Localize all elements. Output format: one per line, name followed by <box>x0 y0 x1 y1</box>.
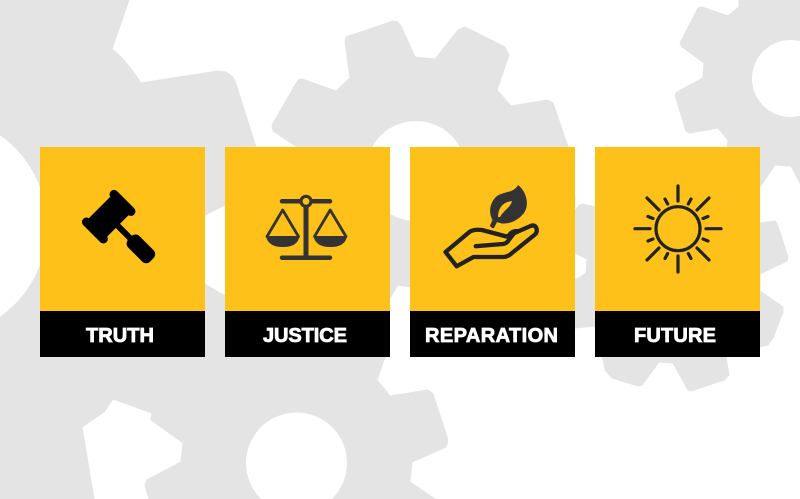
hole: top right gear <box>752 40 800 117</box>
card background <box>40 147 205 311</box>
icon: sun <box>635 186 721 272</box>
gear: top centre <box>250 21 575 300</box>
label bar <box>410 311 575 357</box>
heading: justice: JUSTICE <box>263 325 347 347</box>
heading: future: FUTURE <box>634 325 716 347</box>
gear: large left <box>0 0 300 499</box>
label bar <box>595 311 760 357</box>
hole: bottom centre gear <box>246 412 347 499</box>
icon: hand with leaf <box>446 185 537 266</box>
gear: top right <box>675 0 800 187</box>
hole: top centre gear <box>366 121 466 221</box>
icon: gavel <box>80 188 169 277</box>
heading: reparation: REPARATION <box>425 325 558 347</box>
panel: justice <box>225 147 390 357</box>
hole: left gear <box>0 115 47 337</box>
gear: lower right <box>565 200 788 391</box>
gear: bottom centre <box>145 340 448 499</box>
leaf vein <box>498 201 512 217</box>
panel: reparation <box>410 147 575 357</box>
panel: truth <box>40 147 205 357</box>
label bar <box>40 311 205 357</box>
card background <box>410 147 575 311</box>
leaf <box>490 185 527 228</box>
label bar <box>225 311 390 357</box>
card background <box>595 147 760 311</box>
hand <box>446 225 537 266</box>
icon: scales <box>266 196 347 258</box>
card background <box>225 147 390 311</box>
heading: truth: TRUTH <box>86 325 154 347</box>
panel: future <box>595 147 760 357</box>
